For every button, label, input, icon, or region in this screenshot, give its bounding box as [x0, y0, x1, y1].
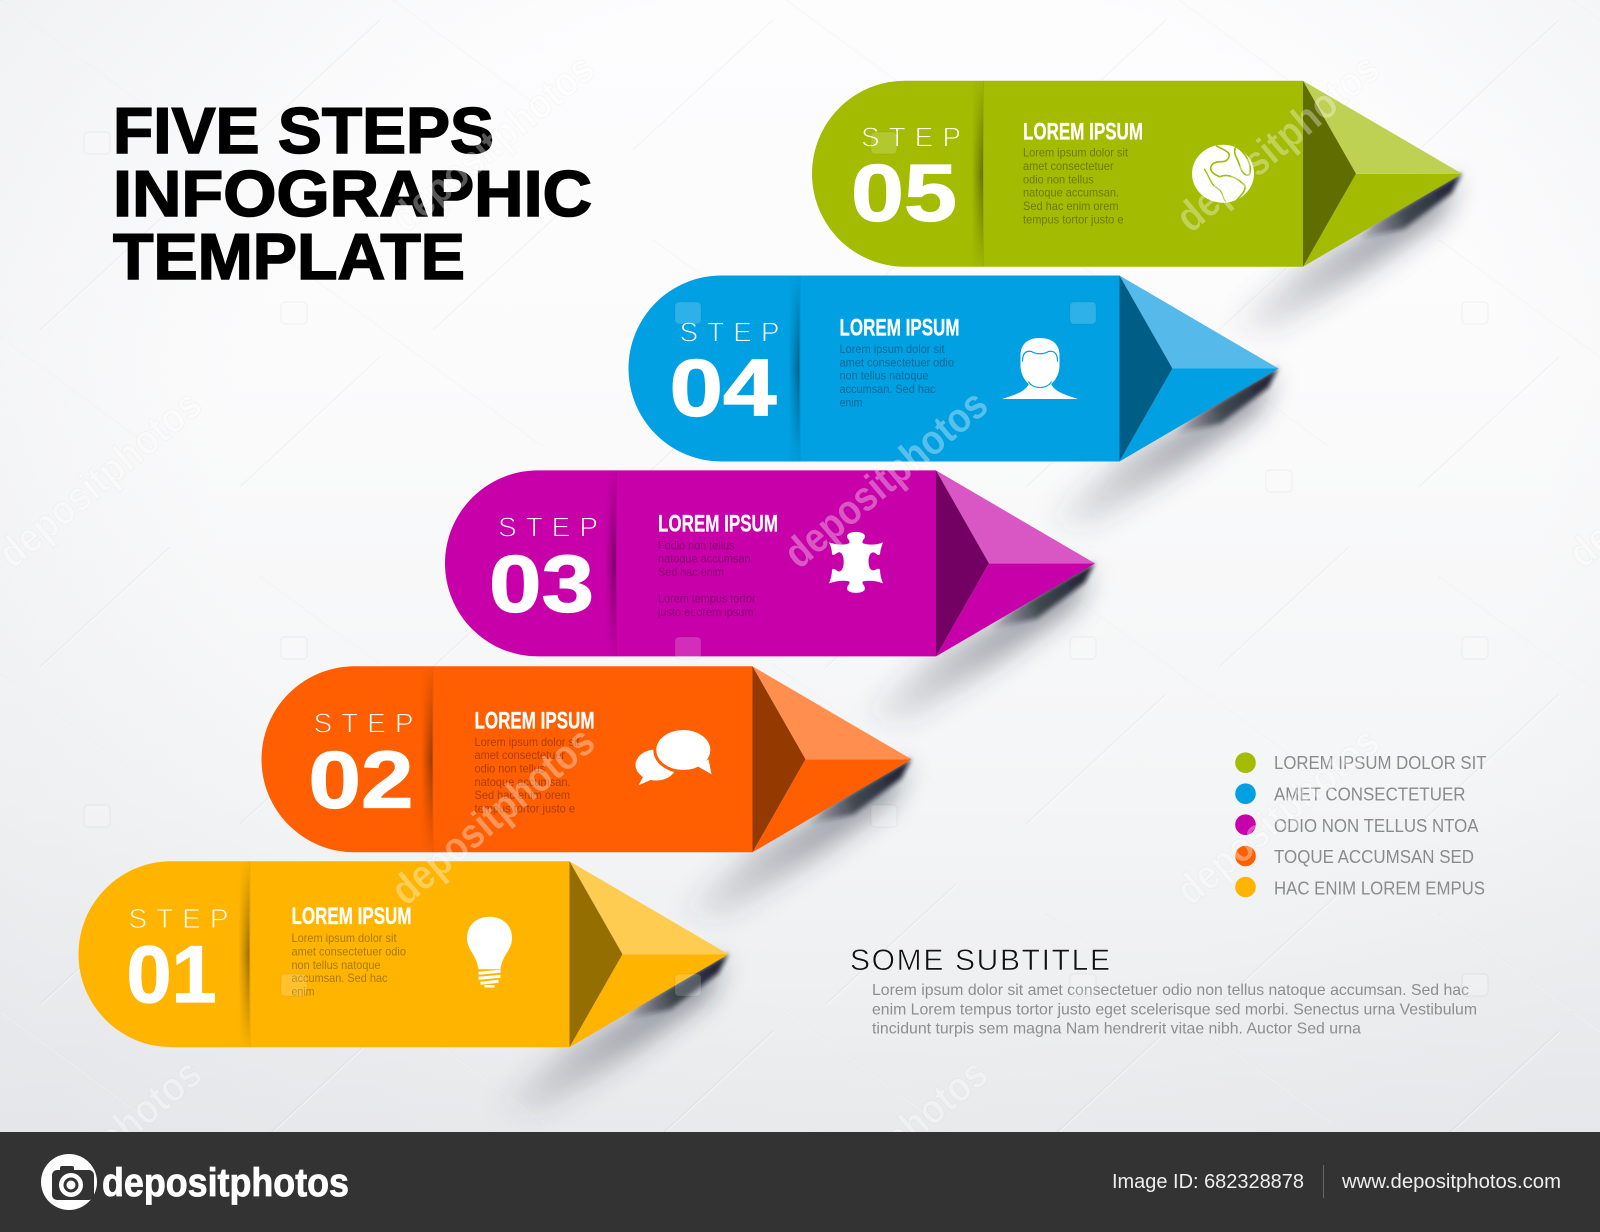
arrow head — [1120, 276, 1278, 462]
icon: person — [1002, 338, 1078, 399]
step 02 body text: odio non tellus — [474, 761, 545, 775]
step 03 body text: natoque accumsan — [658, 552, 751, 566]
panel: step 01 — [78, 861, 728, 1047]
step 01 body text: amet consectetuer odio — [292, 945, 406, 959]
legend: HAC ENIM LOREM EMPUS — [1274, 878, 1485, 898]
icon: globe — [1192, 145, 1254, 203]
legend: ODIO NON TELLUS NTOA — [1274, 816, 1478, 836]
footer url: www.depositphotos.com — [1341, 1171, 1561, 1193]
panel: step 03: STEP — [498, 511, 598, 542]
panel: step 01: STEP — [128, 903, 228, 934]
step 03 body text: Lorem tempus tortor — [658, 592, 756, 606]
subtitle paragraph: enim Lorem tempus tortor justo eget scelerisque sed morbi. Senectus urna Vestibulum — [872, 1002, 1477, 1018]
step 03 body text: Fodio non tellus — [658, 538, 735, 552]
arrow shadows — [496, 173, 1462, 1111]
step 05 body text: natoque accumsan. — [1023, 186, 1119, 200]
step 05 body text: Lorem ipsum dolor sit — [1023, 146, 1129, 160]
panel: step 01: LOREM IPSUM — [292, 903, 412, 930]
step 03 body text — [657, 538, 756, 619]
step 02 body text: Sed hac enim orem — [474, 788, 570, 802]
icon: puzzle piece — [829, 532, 883, 593]
step 05 body text: odio non tellus — [1023, 172, 1094, 186]
step 01 body text: enim — [292, 985, 314, 999]
panel: step 04: 04 — [670, 344, 776, 434]
panel: step 02: 02 — [308, 735, 414, 825]
subtitle paragraph: Lorem ipsum dolor sit amet consectetuer odio non tellus natoque accumsan. Sed hac — [872, 982, 1469, 999]
step 01 body text: non tellus natoque — [292, 958, 381, 972]
step 05 body text: Sed hac enim orem — [1023, 199, 1118, 213]
title: INFOGRAPHIC — [113, 157, 592, 230]
step 02 body text: natoque accumsan. — [474, 775, 570, 789]
footer image id: Image ID: 682328878 — [1112, 1171, 1304, 1193]
step 04 body text: non tellus natoque — [840, 369, 929, 383]
panel: step 05: STEP — [861, 122, 961, 153]
footer bar — [0, 1132, 1600, 1232]
icon: chat bubbles — [636, 728, 712, 785]
title: FIVE STEPS — [113, 94, 494, 167]
footer logo — [41, 1154, 349, 1210]
step 05 body text: amet consectetuer — [1023, 159, 1114, 173]
panel: step 03: LOREM IPSUM — [658, 510, 778, 537]
step 05 body text — [1023, 146, 1129, 226]
step 04 body text: amet consectetuer odio — [840, 355, 954, 369]
panel: step 03 — [445, 470, 1095, 656]
panel: step 05 — [812, 81, 1462, 267]
step 01 body text: accumsan. Sed hac — [292, 971, 388, 985]
step 02 body text: Lorem ipsum dolor sit — [474, 735, 580, 749]
watermark: depositphotos — [382, 717, 603, 914]
subtitle paragraph: tincidunt turpis sem magna Nam hendrerit vitae nibh. Auctor Sed urna — [872, 1020, 1361, 1038]
title — [113, 94, 592, 293]
panel: step 02: LOREM IPSUM — [474, 707, 594, 734]
step 03 body text: justo eLorem ipsum — [657, 605, 754, 619]
step 02 body text: amet consectetuer — [474, 748, 565, 762]
step 04 body text: Lorem ipsum dolor sit — [840, 342, 945, 356]
step 04 body text — [840, 342, 954, 409]
title: TEMPLATE — [113, 220, 465, 293]
legend: AMET CONSECTETUER — [1274, 784, 1466, 804]
legend: TOQUE ACCUMSAN SED — [1274, 847, 1474, 867]
step 02 body text — [474, 735, 580, 815]
panel: step 05: LOREM IPSUM — [1023, 119, 1143, 146]
legend: LOREM IPSUM DOLOR SIT — [1274, 753, 1486, 773]
panel: step 04: STEP — [680, 316, 780, 348]
arrow head — [752, 666, 912, 852]
step 05 body text: tempus tortor justo e — [1023, 212, 1124, 226]
step 01 body text: Lorem ipsum dolor sit — [292, 931, 397, 945]
watermark: depositphotos — [775, 380, 996, 577]
watermark: depositphotos — [1167, 717, 1388, 914]
panel: step 04: LOREM IPSUM — [840, 314, 960, 342]
panel: step 04 — [628, 276, 1278, 462]
panel: step 02 — [262, 666, 912, 852]
step 01 body text — [292, 931, 406, 998]
watermark: depositphotos — [1167, 44, 1388, 241]
step 03 body text: Sed hac enim — [658, 565, 724, 579]
arrow head — [570, 861, 728, 1047]
panel: step 05: 05 — [851, 149, 957, 239]
arrow head — [936, 470, 1095, 656]
icon: light bulb — [467, 917, 512, 986]
subtitle paragraph — [872, 982, 1477, 1038]
arrow head — [1303, 81, 1462, 267]
step 04 body text: accumsan. Sed hac — [840, 382, 936, 396]
step 02 body text: tempus tortor justo e — [474, 801, 575, 815]
step 04 body text: enim — [840, 395, 862, 409]
legend — [1235, 752, 1486, 898]
watermark: depositphotos — [382, 44, 603, 241]
footer logo: depositphotos — [102, 1161, 349, 1205]
subtitle: SOME SUBTITLE — [850, 944, 1110, 977]
panel: step 01: 01 — [126, 930, 216, 1020]
panel: step 03: 03 — [489, 539, 594, 629]
panel: step 02: STEP — [314, 707, 414, 738]
